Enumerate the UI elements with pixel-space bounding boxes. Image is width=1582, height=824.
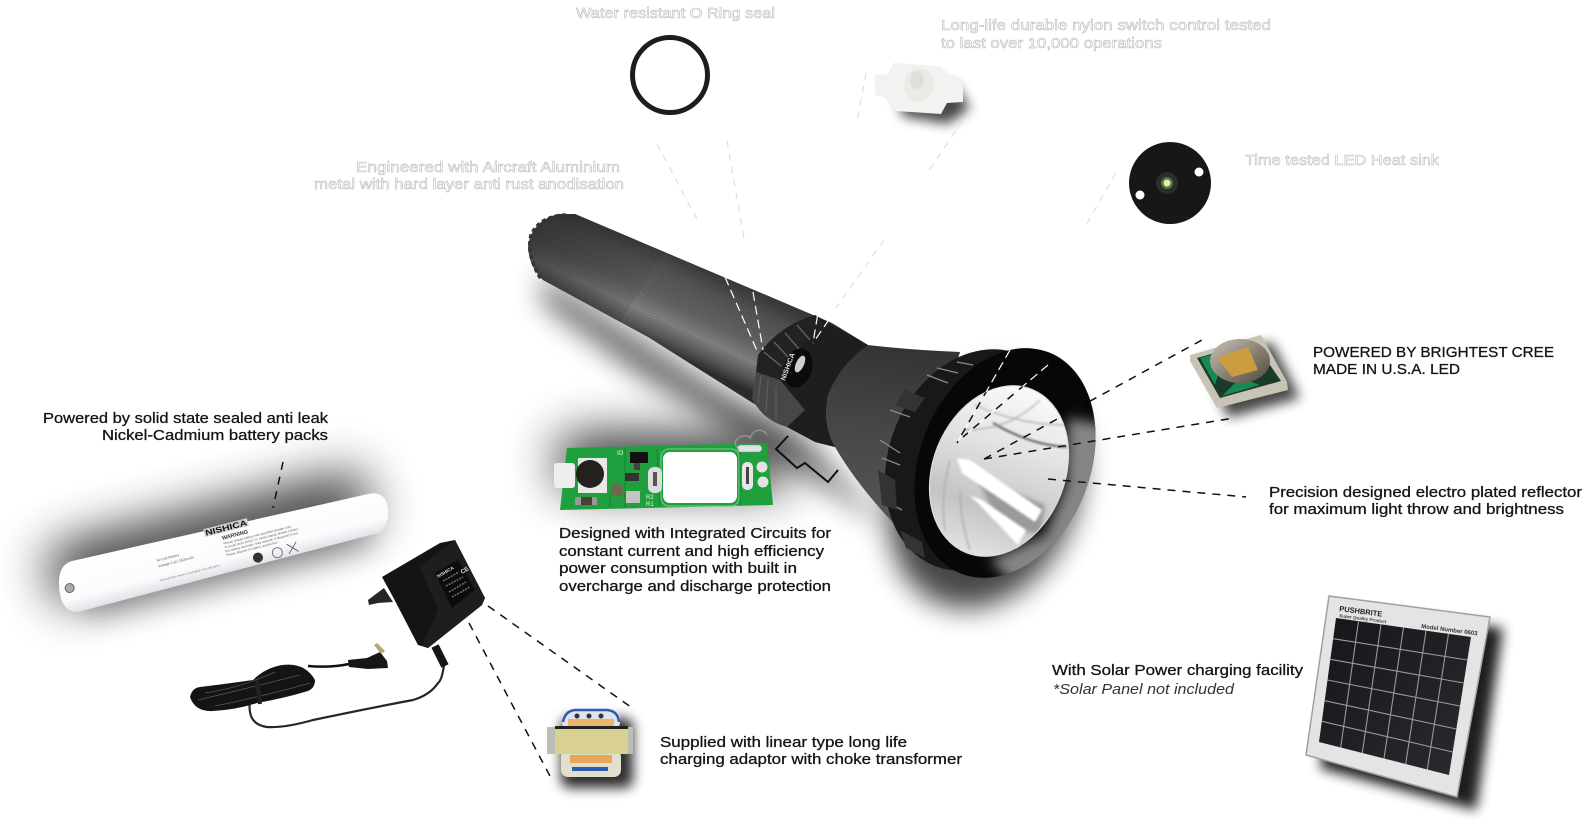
panel brand text: Super Quality Product xyxy=(1339,613,1387,624)
PCB halo shadow xyxy=(560,438,785,486)
flashlight body drop shadow xyxy=(540,275,890,530)
label: circuit board: overcharge and discharge protection xyxy=(559,578,831,595)
ceramic package xyxy=(1190,335,1288,408)
icon: choke transformer xyxy=(547,710,633,788)
DC plug xyxy=(348,643,388,669)
head cone xyxy=(826,345,960,535)
front rim xyxy=(914,348,1096,578)
label: solar charging: *Solar Panel not included xyxy=(1053,681,1235,698)
battery label text: To avoid short-circuit, no metal objects should contact xyxy=(224,527,298,550)
switch button xyxy=(779,345,817,391)
knurled bezel ring xyxy=(853,321,1101,599)
adaptor label: NISHICA xyxy=(436,565,455,579)
switch collar upper xyxy=(756,315,828,380)
label: transformer xyxy=(660,734,962,768)
label: solar charging: With Solar Power charging facility xyxy=(1052,662,1304,679)
solar panel shadow xyxy=(1320,610,1503,810)
flashlight xyxy=(528,213,1096,578)
connector xyxy=(554,463,575,488)
lens dome xyxy=(1210,339,1270,383)
label: solar charging xyxy=(1052,662,1304,698)
battery label text: Please charge battery with specified charger only. xyxy=(223,524,292,546)
panel brand text: Model Number 0603 xyxy=(1421,624,1478,637)
heading: LED heat sink: Time tested LED Heat sink xyxy=(1245,152,1440,169)
silkscreen labels xyxy=(617,451,654,508)
label: circuit board: power consumption with built in xyxy=(559,560,797,577)
battery label text: NISHICA xyxy=(204,518,248,538)
dark thin streak xyxy=(993,423,1067,447)
second bright streak xyxy=(970,495,1026,545)
heading: nylon switch control: to last over 10,000 operations xyxy=(941,35,1162,52)
battery label text: Voltage 4.8V 2500mAh xyxy=(158,556,194,568)
icon: CREE LED xyxy=(1190,335,1300,418)
wall prongs xyxy=(368,588,393,605)
cell grid xyxy=(1322,621,1467,770)
black leader segments inside reflector xyxy=(956,386,1024,444)
tail shading xyxy=(528,214,665,322)
icon: nylon switch xyxy=(875,63,970,124)
switch collar lower xyxy=(752,372,805,427)
heading: aircraft aluminium: Engineered with Aircraft Aluminium xyxy=(356,159,620,176)
icon: circuit board xyxy=(554,430,773,510)
gray streak area xyxy=(978,484,1046,535)
faint leader lines xyxy=(657,73,1116,308)
battery label text: THIS BATTERY PACK IS SUITABLE FOR USE WITH xyxy=(159,563,220,583)
panel brand text xyxy=(1339,604,1478,637)
collar lower ribs xyxy=(758,376,776,420)
label: battery xyxy=(43,410,329,444)
upper streak lines xyxy=(943,400,1065,550)
coil top xyxy=(562,710,620,730)
neck behind switch xyxy=(778,315,868,447)
traces xyxy=(610,448,740,508)
laminations xyxy=(547,727,633,754)
yellow core xyxy=(555,728,628,754)
LED chip xyxy=(1217,347,1258,377)
label: battery: Nickel-Cadmium battery packs xyxy=(102,427,328,444)
icon: O ring seal xyxy=(632,38,708,112)
brand mark on collar: NISHICA xyxy=(780,352,797,382)
label: CREE LED: MADE IN U.S.A. LED xyxy=(1313,361,1460,378)
strain relief xyxy=(435,646,445,666)
battery halo shadow xyxy=(46,473,377,617)
reflector xyxy=(930,386,1068,556)
label: transformer: charging adaptor with choke transformer xyxy=(660,751,962,768)
spring contact xyxy=(735,430,767,452)
heading: water resistant O ring seal: Water resistant O Ring seal xyxy=(576,5,775,22)
inductor xyxy=(576,458,607,493)
body knurl texture xyxy=(528,214,868,447)
label: transformer: Supplied with linear type long life xyxy=(660,734,907,751)
icon: LED heat sink xyxy=(1129,142,1211,224)
black leader lines from reflector xyxy=(984,340,1246,497)
battery label text: WARNING xyxy=(221,529,249,542)
label: circuit board: Designed with Integrated Circuits for xyxy=(559,525,831,542)
reflector rim highlight xyxy=(905,365,1093,577)
icon: solar panel xyxy=(1306,596,1490,797)
flashlight head drop shadow xyxy=(854,342,1116,638)
collar upper ribs xyxy=(764,325,810,366)
flashlight body tube xyxy=(528,214,868,447)
battery label text xyxy=(59,507,304,610)
bright streak xyxy=(957,458,1042,522)
heading: nylon switch control xyxy=(941,17,1271,52)
label: circuit board: constant current and high efficiency xyxy=(559,543,825,560)
battery label text: Please dispose in battery recycle box. xyxy=(226,540,279,557)
battery label text: Ni-Cad Battery xyxy=(156,553,180,563)
adaptor box xyxy=(382,540,485,648)
cord xyxy=(250,665,444,727)
label: reflector: Precision designed electro plated reflector xyxy=(1269,484,1582,501)
adaptor label xyxy=(435,560,475,608)
substrate xyxy=(1197,342,1281,398)
silkscreen labels: R2 xyxy=(646,495,654,501)
tail cap scallops xyxy=(530,215,566,279)
label: CREE LED: POWERED BY BRIGHTEST CREE xyxy=(1313,344,1554,361)
label: battery: Powered by solid state sealed anti leak xyxy=(43,410,329,427)
heading: aircraft aluminium xyxy=(314,159,624,193)
heading: aircraft aluminium: metal with hard layer anti rust anodisation xyxy=(314,176,624,193)
icon: charging adaptor xyxy=(190,540,485,727)
label: reflector xyxy=(1269,484,1582,518)
battery label text: the battery terminals. May explode, if disposed in fire. xyxy=(225,531,299,553)
board window xyxy=(661,449,739,506)
label: reflector: for maximum light throw and brightness xyxy=(1269,501,1564,518)
small components xyxy=(575,462,768,505)
leaders: adaptor to transformer xyxy=(469,606,635,778)
bracket connector xyxy=(776,436,838,482)
silkscreen labels: R1 xyxy=(646,502,654,508)
leader: battery xyxy=(273,462,283,508)
white leader lines over flashlight xyxy=(725,277,1048,443)
black chip xyxy=(630,452,648,470)
panel brand text: PUSHBRITE xyxy=(1339,604,1383,619)
label: circuit board xyxy=(559,525,831,595)
heading: nylon switch control: Long-life durable nylon switch control tested xyxy=(941,17,1271,34)
cord coil xyxy=(190,665,315,711)
silkscreen labels: IO xyxy=(617,451,624,457)
coil bottom xyxy=(561,750,621,777)
adaptor label: CE xyxy=(460,566,470,576)
icon: battery pack xyxy=(59,493,388,612)
label: CREE LED xyxy=(1313,344,1554,378)
